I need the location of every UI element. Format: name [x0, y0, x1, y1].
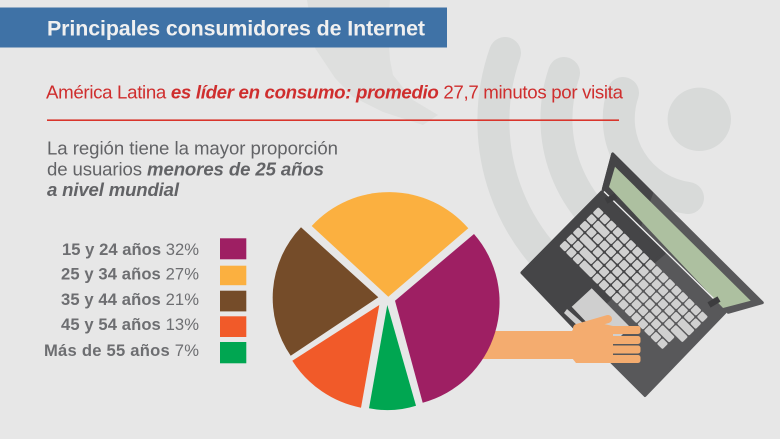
legend row: 45 y 54: 45 y 54 años 13% [61, 315, 199, 334]
pie chart [273, 192, 500, 410]
hinge line [604, 192, 714, 298]
text block: user age statement: de usuarios menores de 25 años [47, 158, 324, 179]
headline: consumption in Latin America: América Latina es líder en consumo: promedio 27,7 minutos por visita [46, 81, 624, 102]
palm [572, 322, 613, 363]
legend row: 15 y 24 [62, 238, 246, 259]
background icon: wifi signal [493, 53, 731, 295]
text block: user age statement: a nivel mundial [47, 179, 180, 200]
slice: 45 y 54 [292, 305, 379, 408]
keyboard [561, 209, 706, 354]
text block: user age statement: La región tiene la mayor proporción [47, 137, 338, 158]
laptop base dark part [522, 192, 664, 328]
arm [480, 331, 575, 359]
legend row: 35 y 44: 35 y 44 años 21% [61, 290, 199, 309]
trackpad button [564, 309, 584, 328]
slice: 15 y 24 [395, 234, 500, 403]
red divider line [47, 119, 619, 121]
text block: user age statement [47, 137, 338, 200]
background map: South America tip [307, 0, 438, 125]
arm and hand [480, 319, 640, 363]
title banner [0, 8, 447, 48]
legend row: 25 y 34: 25 y 34 años 27% [61, 264, 199, 284]
laptop base [522, 192, 725, 396]
slice: 35 y 44 [273, 227, 378, 356]
laptop [522, 154, 762, 396]
legend row: mas de 55 [44, 341, 246, 363]
laptop screen frame [603, 154, 762, 312]
fingers [605, 326, 640, 363]
hinges [606, 196, 719, 305]
title banner: Principales consumidores de Internet [47, 16, 425, 40]
legend row: 45 y 54 [61, 315, 246, 337]
legend row: mas de 55: Más de 55 años 7% [44, 341, 199, 360]
slice: mas de 55 [369, 305, 416, 410]
legend row: 35 y 44 [61, 290, 246, 311]
laptop display [609, 167, 751, 308]
legend row: 15 y 24: 15 y 24 años 32% [62, 240, 199, 259]
slice: 25 y 34 [312, 192, 468, 297]
thumb [577, 319, 608, 328]
trackpad [572, 288, 630, 347]
legend row: 25 y 34 [61, 264, 246, 285]
legend [44, 238, 246, 363]
laptop screen frame dark part [603, 154, 652, 225]
